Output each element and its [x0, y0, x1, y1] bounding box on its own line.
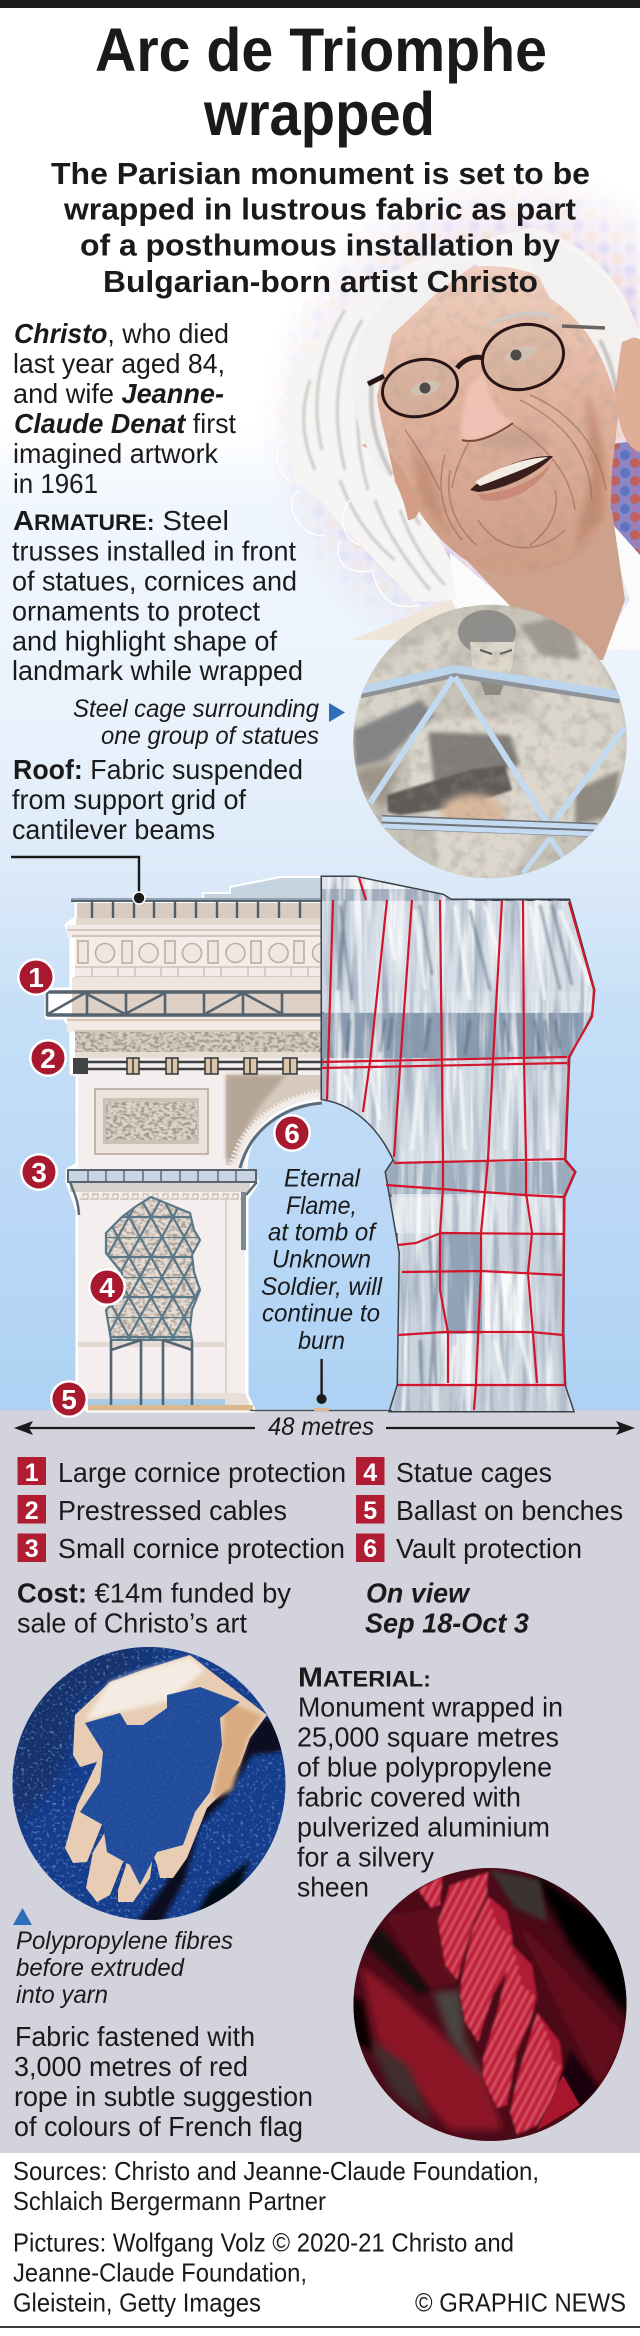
plinth band	[78, 1342, 226, 1347]
text block: eternal flame: Unknown	[272, 1246, 371, 1274]
text block: roof: Roof: Fabric suspended	[13, 754, 303, 785]
marker 1: 1	[28, 962, 44, 993]
title: Arc de Triomphe	[95, 16, 547, 84]
subtitle: of a posthumous installation by	[80, 228, 561, 262]
marker 5: 5	[61, 1384, 77, 1415]
back of roof	[203, 877, 322, 900]
legend item 5: 5	[363, 1497, 377, 1525]
hair overlapping face edge	[352, 232, 640, 480]
icon: pointer triangle right	[329, 703, 345, 722]
caption: polypropylene fibres	[16, 1927, 233, 2009]
helmet	[458, 610, 516, 654]
truss background stone	[72, 990, 322, 1017]
text block: material	[297, 1662, 563, 1902]
text block: Christo intro: Christo, who died	[14, 318, 229, 349]
grey patch center	[433, 1990, 485, 2080]
text block: eternal flame: at tomb of	[268, 1218, 378, 1246]
title: wrapped	[203, 80, 435, 148]
hair grey strands	[304, 255, 632, 590]
red ropes	[322, 878, 594, 1410]
text block: material: Monument wrapped in	[298, 1692, 563, 1722]
marker 5	[50, 1380, 88, 1418]
grey strip near top	[490, 1870, 547, 1922]
rope strands	[418, 1872, 563, 2135]
left black edge	[350, 1995, 372, 2052]
ballast benches	[88, 1405, 253, 1410]
shirt collar	[450, 510, 640, 650]
text block: cost: Cost: €14m funded by	[17, 1578, 291, 1608]
white folds	[345, 905, 590, 1384]
text block: eternal flame: Eternal	[284, 1164, 361, 1192]
legend item 4: Statue cages	[396, 1457, 552, 1488]
caption: steel cage	[73, 695, 319, 750]
left crimson fold	[360, 1965, 503, 2130]
dark folds	[338, 900, 572, 1385]
footer sources and credits: Pictures: Wolfgang Volz © 2020-21 Christo and	[13, 2228, 514, 2258]
text block: rope: rope in subtle suggestion	[14, 2081, 313, 2112]
footer sources and credits	[13, 2156, 539, 2318]
text block: Christo intro: in 1961	[13, 468, 98, 499]
dark forearm	[387, 765, 512, 815]
strong bokeh at right	[606, 440, 640, 560]
wrinkles	[405, 395, 606, 548]
stone texture	[350, 600, 630, 882]
portrait photo of Christo	[277, 182, 640, 660]
black crease	[365, 1928, 430, 1995]
eternal flame pointer	[317, 1359, 327, 1404]
subtitle	[51, 156, 590, 299]
stone attic	[67, 903, 322, 990]
legend item 4: 4	[363, 1459, 377, 1487]
text block: Christo intro: Claude Denat first	[14, 408, 236, 439]
photo circle: red rope	[350, 1865, 630, 2145]
black upper right	[530, 1870, 630, 2020]
text block: material: for a silvery	[297, 1842, 434, 1872]
legend item 3: Small cornice protection	[58, 1533, 345, 1564]
text block: armature: of statues, cornices and	[12, 566, 297, 596]
grey lower panel	[0, 1410, 640, 2153]
small cornice protection	[68, 1170, 257, 1250]
legend item 3: 3	[25, 1535, 39, 1563]
text block: eternal flame: Flame,	[286, 1192, 357, 1220]
glasses	[368, 316, 605, 424]
text block: armature: ornaments to protect	[12, 596, 260, 626]
white halo around stone	[47, 903, 322, 1410]
left relief arm	[354, 624, 460, 728]
spandrel relief	[226, 1075, 322, 1168]
base steps	[82, 1393, 250, 1405]
text block: Christo intro: and wife Jeanne-	[13, 378, 224, 409]
stone lower body	[78, 1058, 322, 1405]
marker 1	[17, 958, 55, 996]
arch illustration	[11, 857, 602, 1418]
dimension: 48 metres	[14, 1413, 635, 1441]
flame plate	[314, 1408, 329, 1411]
sky background	[0, 0, 640, 1411]
pellet pile	[78, 1685, 243, 1887]
legend item 2: 2	[25, 1497, 39, 1525]
chest shadow	[428, 732, 520, 790]
marker 6: 6	[284, 1118, 300, 1149]
roof rail and posts	[71, 899, 322, 918]
face	[375, 266, 620, 575]
nose	[461, 372, 515, 441]
caption: polypropylene fibres: Polypropylene fibres	[16, 1927, 233, 1955]
coat	[352, 596, 510, 640]
text block: armature: and highlight shape of	[12, 626, 277, 656]
text block: material: pulverized aluminium	[297, 1812, 550, 1842]
legend item 5: Ballast on benches	[396, 1495, 623, 1526]
marker 4	[88, 1268, 126, 1306]
text block: armature: ARMATURE: Steel	[13, 505, 229, 536]
marker 3: 3	[31, 1157, 47, 1188]
eyebrow	[490, 313, 555, 325]
hand	[65, 1655, 267, 1902]
text block: eternal flame: burn	[298, 1327, 345, 1355]
text block: Christo intro: imagined artwork	[13, 438, 219, 469]
text block: rope: of colours of French flag	[14, 2111, 303, 2142]
footer sources and credits: Jeanne-Claude Foundation,	[13, 2258, 307, 2288]
left shadow below arm	[353, 760, 400, 810]
text block: roof: cantilever beams	[12, 814, 215, 845]
caption: steel cage: one group of statues	[101, 722, 319, 750]
footer sources and credits: Sources: Christo and Jeanne-Claude Foundation,	[13, 2156, 539, 2186]
footer sources and credits: Schlaich Bergermann Partner	[13, 2186, 326, 2216]
belly	[441, 794, 505, 830]
text block: roof	[12, 754, 303, 845]
marker 3	[20, 1153, 58, 1191]
legend	[18, 1457, 623, 1564]
eyes	[409, 378, 441, 398]
text block: on view dates: On view	[366, 1578, 471, 1608]
subtitle: The Parisian monument is set to be	[51, 156, 590, 191]
mouth	[470, 456, 553, 501]
legend item 1: Large cornice protection	[58, 1457, 346, 1488]
text block: eternal flame	[261, 1164, 383, 1355]
bottom rule	[0, 2326, 640, 2328]
subtitle: wrapped in lustrous fabric as part	[63, 192, 576, 226]
top bar	[0, 0, 640, 8]
text block: armature	[12, 505, 303, 686]
attic circles and panels	[78, 941, 332, 963]
relief panel	[95, 1089, 208, 1154]
text block: rope: Fabric fastened with	[15, 2021, 255, 2052]
text block: material: fabric covered with	[297, 1782, 521, 1812]
text block: armature: landmark while wrapped	[12, 655, 303, 686]
text block: on view dates	[365, 1578, 529, 1638]
upper cornice and relief	[67, 1017, 322, 1058]
large cornice truss	[47, 990, 322, 1016]
legend item 6: Vault protection	[396, 1533, 582, 1564]
roof leader line	[11, 857, 145, 904]
text block: material: MATERIAL:	[298, 1662, 431, 1692]
skin mottling	[381, 272, 618, 568]
grey lower left	[370, 2040, 432, 2122]
marker 6	[273, 1114, 311, 1152]
text block: material: 25,000 square metres	[297, 1722, 559, 1752]
text block: material: sheen	[297, 1872, 369, 1902]
steel beams	[360, 669, 625, 873]
text block: cost	[17, 1578, 291, 1638]
text block: Christo intro	[13, 318, 236, 499]
legend item 1: 1	[25, 1459, 39, 1487]
marker 2: 2	[40, 1043, 56, 1074]
upper left fold	[385, 1908, 457, 1988]
statue face	[470, 642, 515, 674]
subtitle: Bulgarian-born artist Christo	[103, 264, 538, 299]
text block: rope	[14, 2021, 313, 2142]
text block: armature: trusses installed in front	[12, 536, 296, 566]
hair	[276, 228, 640, 607]
wrapped half of the arch	[322, 877, 602, 1412]
credit: © GRAPHIC NEWS	[415, 2288, 626, 2318]
text block: material: of blue polypropylene	[297, 1752, 552, 1782]
text block: on view dates: Sep 18-Oct 3	[365, 1608, 529, 1638]
caption: polypropylene fibres: into yarn	[16, 1981, 108, 2009]
dimension: 48 metres: 48 metres	[268, 1413, 374, 1441]
title	[95, 16, 547, 148]
marker 2	[29, 1039, 67, 1077]
marker 4: 4	[99, 1272, 115, 1303]
shadows	[135, 1718, 290, 1925]
ears	[616, 337, 640, 452]
text block: Christo intro: last year aged 84,	[13, 348, 225, 379]
bokeh halo	[277, 182, 640, 622]
ground line	[250, 1410, 392, 1412]
text block: eternal flame: continue to	[262, 1300, 380, 1328]
text block: roof: from support grid of	[12, 784, 246, 815]
text block: rope: 3,000 metres of red	[14, 2051, 248, 2082]
photo circle: polypropylene pellets in hand	[10, 1645, 290, 1925]
hair shading over temple	[371, 340, 616, 475]
text block: cost: sale of Christo’s art	[17, 1608, 247, 1638]
caption: polypropylene fibres: before extruded	[16, 1954, 185, 1982]
prestressed cables	[73, 1058, 322, 1074]
legend item 2: Prestressed cables	[58, 1495, 287, 1526]
photo circle: statue group in steel cage	[350, 600, 630, 882]
legend item 6: 6	[363, 1535, 377, 1563]
icon: pointer triangle up	[13, 1908, 32, 1925]
footer sources and credits: Gleistein, Getty Images	[13, 2288, 261, 2318]
cheek and jaw shading	[575, 390, 605, 548]
vault protection frame	[240, 1103, 322, 1168]
statue cage	[100, 1195, 205, 1405]
right shapes	[520, 640, 626, 830]
neck	[452, 510, 625, 660]
torso	[410, 715, 565, 878]
text block: eternal flame: Soldier, will	[261, 1273, 383, 1301]
caption: steel cage: Steel cage surrounding	[73, 695, 319, 723]
right crimson folds	[520, 1926, 624, 2084]
